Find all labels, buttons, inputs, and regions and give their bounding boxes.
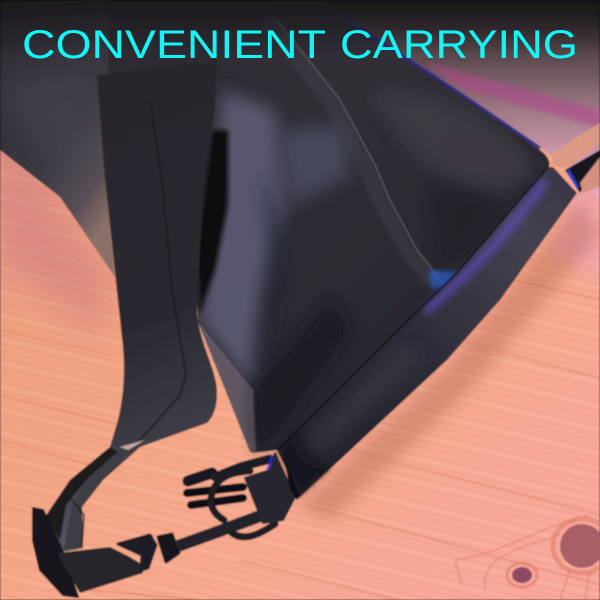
dark shadow beside strap xyxy=(197,130,228,315)
hook arm xyxy=(178,516,260,546)
dark strap end xyxy=(565,150,600,193)
bag seam line xyxy=(277,20,443,283)
roll dark crease xyxy=(277,430,330,497)
upper finger xyxy=(552,123,600,167)
swivel collars xyxy=(158,534,179,562)
left panel highlight xyxy=(0,70,95,190)
title xyxy=(22,23,578,67)
dark crease centre xyxy=(255,170,290,380)
wood knots xyxy=(455,515,600,600)
hook body xyxy=(118,535,156,570)
side release buckle xyxy=(187,452,300,537)
top clip xyxy=(188,473,212,481)
D ring xyxy=(211,471,250,520)
bag dark right zone xyxy=(430,190,520,265)
arm xyxy=(215,459,270,477)
pink tint left xyxy=(0,150,115,340)
dark crease lower xyxy=(255,300,350,450)
bag soft reflection xyxy=(280,125,350,205)
darker grain lines xyxy=(0,270,600,600)
hand holding the roll xyxy=(552,123,600,193)
bag upper right sheen xyxy=(370,93,535,205)
roll purple highlight xyxy=(425,180,546,312)
strap lower band edge xyxy=(45,447,118,540)
title: CARRYING xyxy=(340,23,578,67)
roll sheen xyxy=(300,345,425,460)
lower finger xyxy=(580,157,600,193)
bag highlight left xyxy=(200,90,285,388)
title: CONVENIENT xyxy=(22,23,326,67)
roll inner edge xyxy=(277,167,548,450)
far table top right xyxy=(300,0,600,200)
bag gusset xyxy=(198,322,256,452)
tri-glide buckle xyxy=(33,508,78,597)
fabric tab xyxy=(245,453,295,523)
prongs xyxy=(187,487,243,493)
lower ring xyxy=(232,524,275,537)
roll end tip xyxy=(283,452,300,500)
top dark shading xyxy=(0,0,600,55)
bag left panel xyxy=(0,0,115,277)
tab blue edge xyxy=(268,456,272,469)
bag body xyxy=(0,0,549,453)
strap tab and swivel hook xyxy=(57,516,260,593)
tab xyxy=(57,547,143,593)
strap stitch xyxy=(68,495,84,545)
bag blue edge xyxy=(345,18,540,148)
pink tint right xyxy=(555,170,600,280)
rolled top closure xyxy=(277,167,577,497)
shoulder strap xyxy=(45,60,217,553)
blue glint xyxy=(568,170,578,188)
strap inner lower band xyxy=(64,447,140,550)
strap fold xyxy=(140,100,186,440)
blue reflection xyxy=(428,270,458,290)
strap light sliver xyxy=(120,440,145,450)
bag shadow on table xyxy=(300,200,600,520)
bag seam band xyxy=(268,20,433,283)
